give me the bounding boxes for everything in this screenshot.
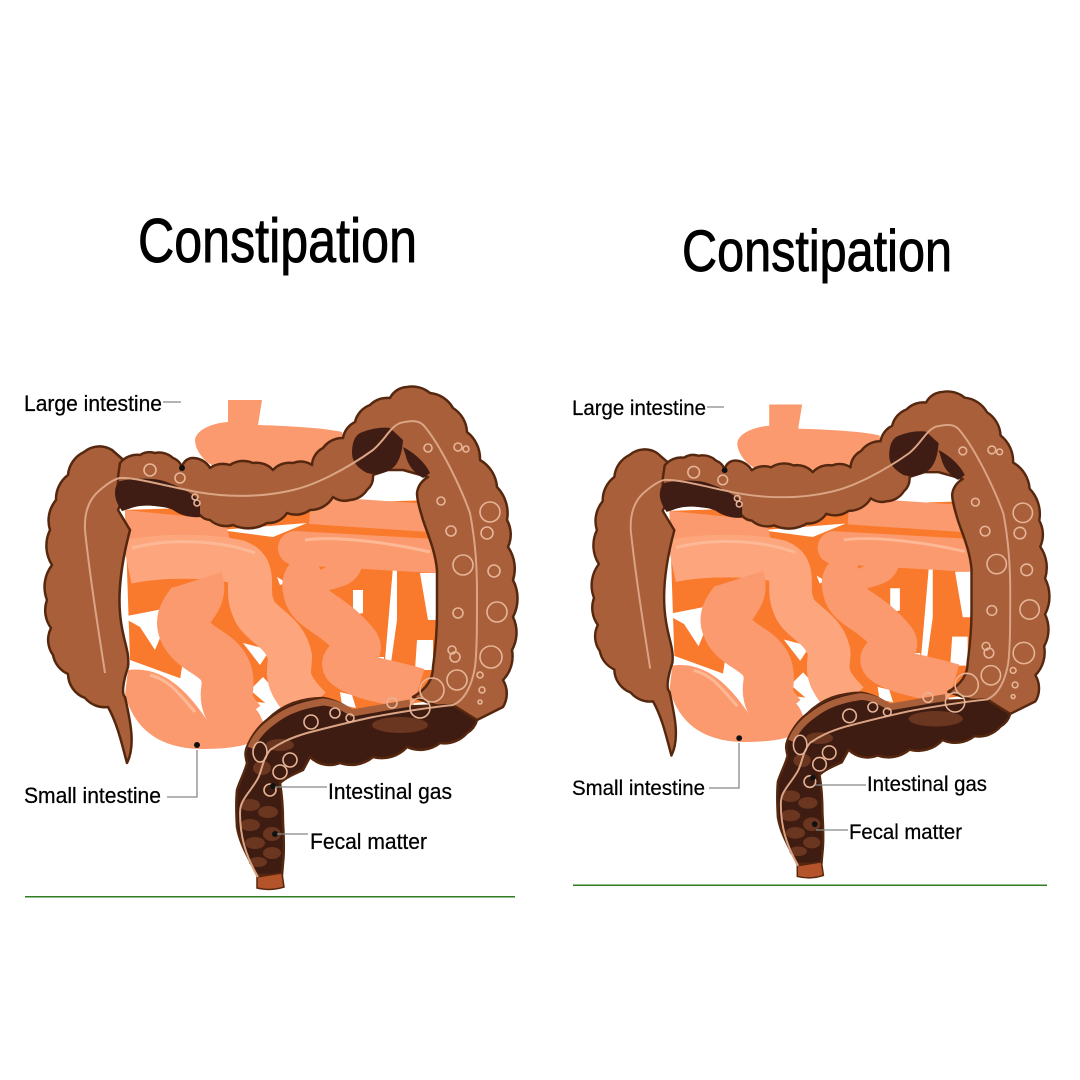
impacted stool: flexures — [115, 428, 430, 517]
illustration: left digestive tract — [45, 387, 518, 889]
transverse and descending colon — [118, 387, 518, 720]
intestinal gas bubbles — [144, 443, 507, 796]
label: large intestine right: Large intestine — [572, 396, 706, 420]
title: right: Constipation — [682, 219, 952, 284]
label: intestinal gas right: Intestinal gas — [867, 772, 987, 796]
stomach — [195, 400, 345, 468]
leader lines: right — [707, 407, 866, 830]
leader lines: left — [163, 402, 327, 834]
baseline: left — [25, 896, 515, 898]
ascending colon and appendix — [45, 446, 135, 763]
label: small intestine right: Small intestine — [572, 776, 705, 800]
lumen line — [85, 421, 477, 877]
sigmoid colon and rectum with stool — [236, 698, 477, 875]
title: left: Constipation — [138, 207, 417, 276]
label: fecal matter left: Fecal matter — [310, 829, 427, 854]
label: large intestine left: Large intestine — [24, 391, 162, 416]
illustration: right digestive tract — [592, 391, 1049, 878]
label: intestinal gas left: Intestinal gas — [328, 779, 452, 804]
label: small intestine left: Small intestine — [24, 783, 161, 808]
leader dots — [179, 465, 278, 837]
anal canal — [257, 873, 284, 889]
label: fecal matter right: Fecal matter — [849, 820, 962, 844]
small intestine — [122, 500, 440, 749]
baseline: right — [573, 884, 1047, 886]
